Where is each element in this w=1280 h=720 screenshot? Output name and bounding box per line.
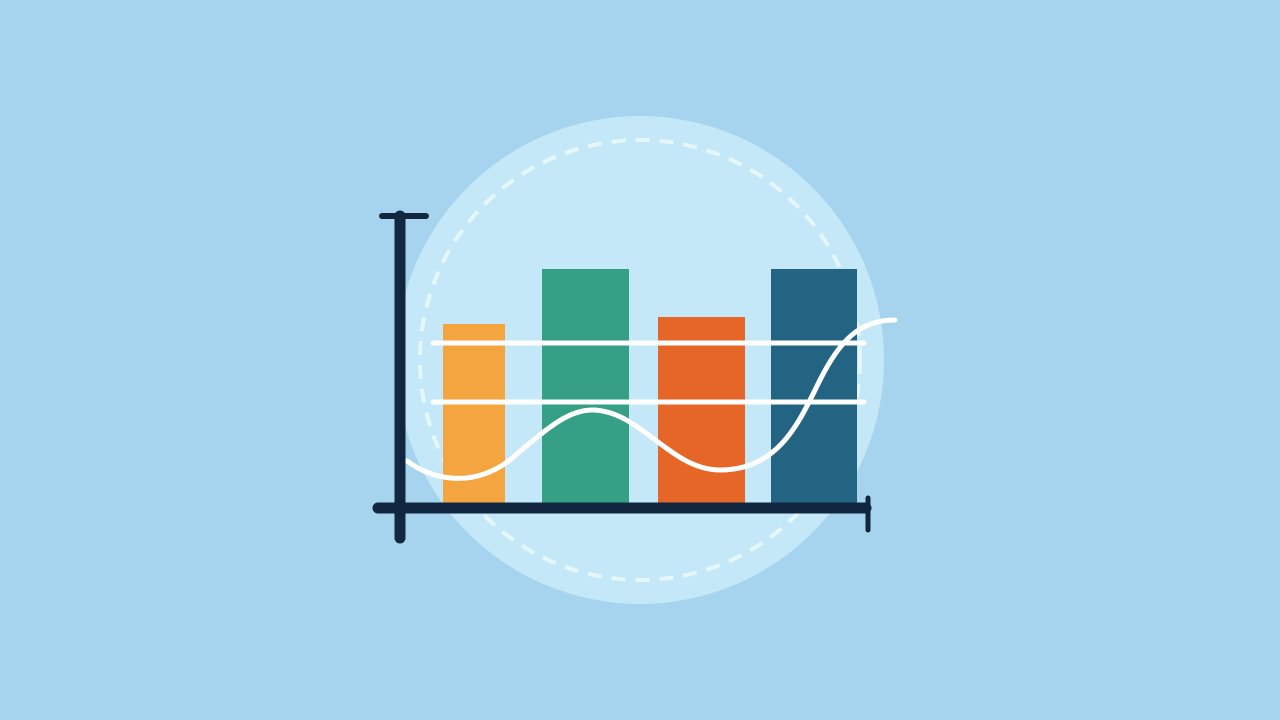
axes bbox=[378, 216, 868, 538]
bar chart bbox=[443, 269, 857, 504]
white guide lines bbox=[433, 343, 864, 402]
wave line bbox=[407, 320, 895, 478]
background circle bbox=[396, 116, 884, 604]
